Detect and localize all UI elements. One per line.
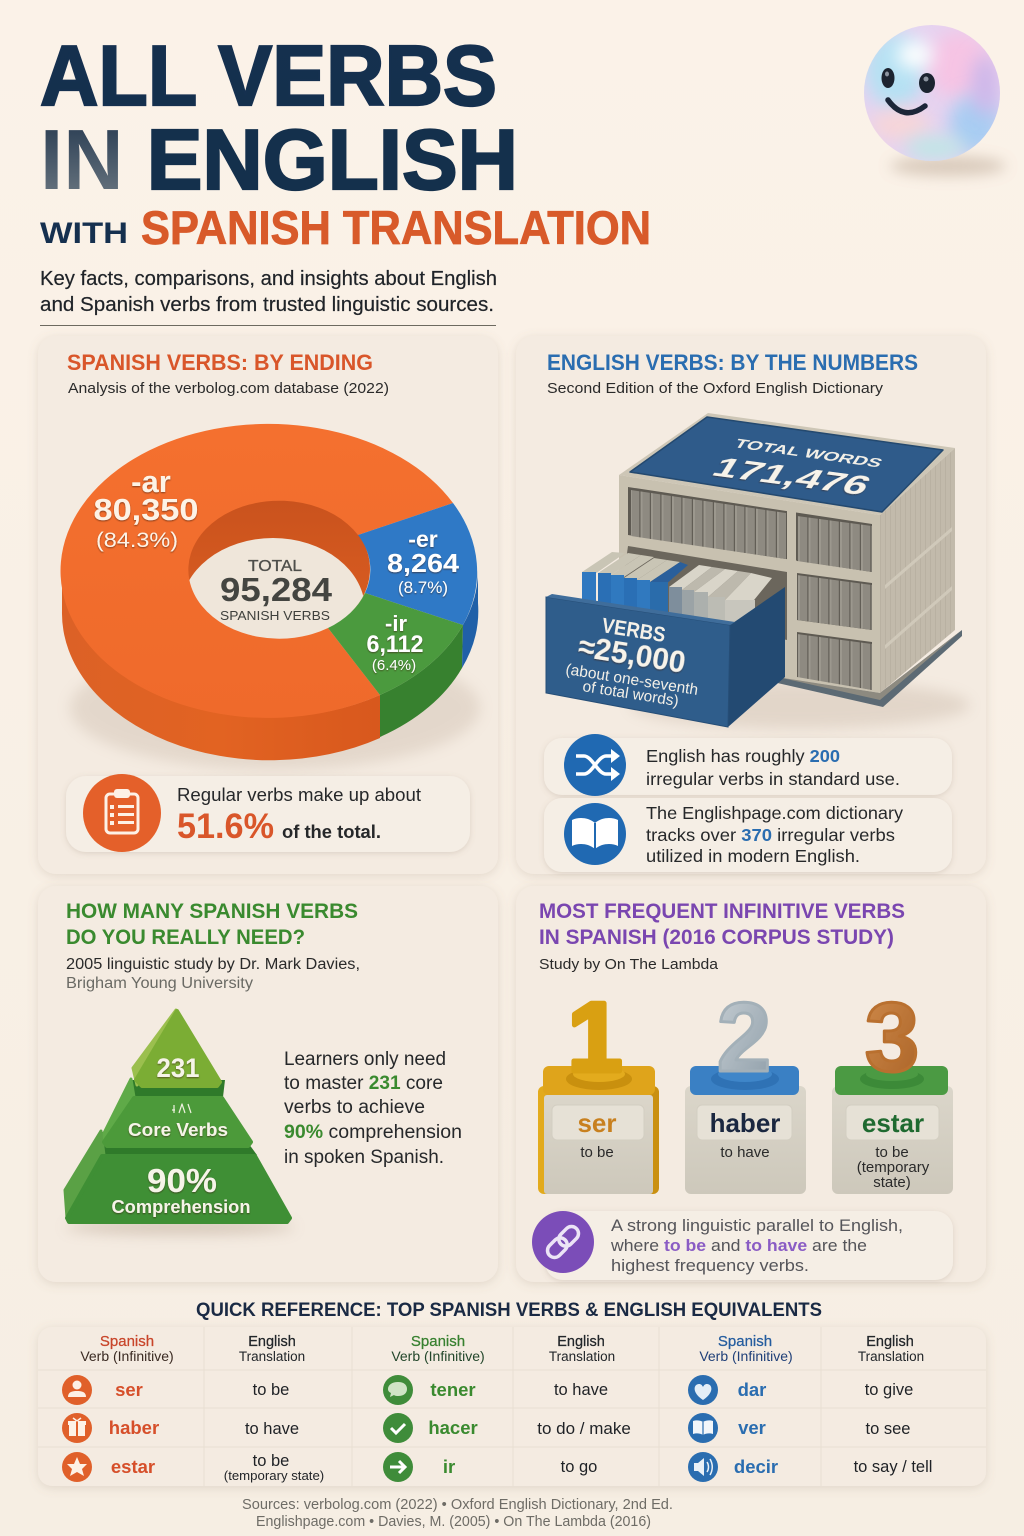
heading: Spanish verbs by ending bbox=[67, 350, 389, 397]
heading: most frequent verbs: IN SPANISH (2016 CORPUS STUDY) bbox=[539, 926, 894, 949]
sources: Englishpage.com • Davies, M. (2005) • On The Lambda (2016) bbox=[256, 1514, 651, 1530]
table header row: Translation bbox=[858, 1349, 924, 1364]
panel: Spanish verbs by ending bbox=[38, 336, 498, 874]
icon: heart bbox=[688, 1375, 718, 1405]
heading: most frequent verbs: MOST FREQUENT INFINITIVE VERBS bbox=[539, 900, 905, 923]
heading: how many verbs: HOW MANY SPANISH VERBS bbox=[66, 900, 358, 923]
heading: how many verbs bbox=[66, 900, 360, 992]
table header row: Translation bbox=[549, 1349, 615, 1364]
segment: -ar: (84.3%) bbox=[96, 529, 178, 552]
segment: -ir bbox=[328, 593, 463, 695]
heading: how many verbs: Brigham Young University bbox=[66, 975, 253, 992]
table header row: Spanish bbox=[100, 1333, 154, 1350]
heading: English verbs bbox=[547, 350, 918, 397]
table header row: Verb (Infinitive) bbox=[699, 1348, 793, 1364]
column group: green verbs: to go bbox=[561, 1458, 597, 1476]
heading: how many verbs: 2005 linguistic study by Dr. Mark Davies, bbox=[66, 956, 360, 973]
column group: red verbs: to have bbox=[245, 1420, 299, 1438]
podium 3: estar: 3 bbox=[865, 982, 919, 1092]
table header row: Spanish bbox=[718, 1333, 772, 1350]
column group: blue verbs: ver bbox=[738, 1417, 766, 1438]
column group: blue verbs: to see bbox=[866, 1420, 910, 1438]
panel: how many Spanish verbs bbox=[38, 886, 498, 1282]
icon: shuffle bbox=[564, 734, 626, 796]
title: SPANISH TRANSLATION bbox=[141, 201, 651, 254]
segment: -ir: (6.4%) bbox=[372, 657, 416, 674]
table heading: QUICK REFERENCE: TOP SPANISH VERBS & ENGLISH EQUIVALENTS bbox=[196, 1300, 822, 1321]
callout: regular verbs: 51.6% bbox=[177, 807, 274, 846]
text: learners need 231: in spoken Spanish. bbox=[284, 1147, 444, 1168]
segment: -er: 8,264 bbox=[387, 548, 460, 578]
column group: blue verbs: to give bbox=[865, 1381, 913, 1399]
callout: linguistic parallel: highest frequency verbs. bbox=[611, 1257, 809, 1275]
table header row: Verb (Infinitive) bbox=[391, 1348, 485, 1364]
column group: green verbs: to have bbox=[554, 1381, 608, 1399]
callout: 200 irregular verbs bbox=[544, 734, 952, 796]
column group: green verbs: hacer bbox=[428, 1417, 478, 1438]
tier: 231 bbox=[133, 1010, 220, 1086]
icon: clipboard bbox=[83, 774, 161, 852]
callout: 370 irregular verbs bbox=[544, 798, 952, 872]
icon: smiling iridescent sphere bbox=[864, 25, 1006, 176]
drawer books bbox=[582, 552, 772, 637]
icon: arrow bbox=[383, 1452, 413, 1482]
segment: -ir: -ir bbox=[385, 611, 407, 636]
heading: most frequent verbs bbox=[539, 900, 905, 973]
heading: Spanish verbs by ending: Analysis of the verbolog.com database (2022) bbox=[68, 380, 389, 397]
podium 2: haber: haber bbox=[710, 1108, 780, 1138]
segment: -er: (8.7%) bbox=[398, 578, 448, 597]
column group: green verbs bbox=[383, 1375, 631, 1482]
column group: red verbs: (temporary state) bbox=[224, 1468, 324, 1483]
segment: -ar bbox=[94, 464, 198, 552]
panel: English verbs by the numbers bbox=[516, 336, 986, 874]
drawer: ≈25,000 bbox=[576, 628, 688, 680]
text: learners need 231: verbs to achieve bbox=[284, 1097, 425, 1118]
heading: most frequent verbs: Study by On The Lambda bbox=[539, 956, 719, 973]
drawer: (about one-seventh bbox=[564, 661, 699, 699]
column group: red verbs bbox=[62, 1375, 324, 1483]
column group: red verbs: to be bbox=[253, 1381, 289, 1399]
tier: 90% comprehension bbox=[65, 1131, 290, 1222]
heading: how many verbs: DO YOU REALLY NEED? bbox=[66, 926, 305, 949]
column group: red verbs: ser bbox=[115, 1379, 143, 1400]
text: learners need 231: Learners only need bbox=[284, 1049, 446, 1070]
table header row: Spanish bbox=[411, 1333, 465, 1350]
heading: Spanish verbs by ending: SPANISH VERBS: BY ENDING bbox=[67, 350, 373, 375]
icon: gift bbox=[62, 1413, 92, 1443]
podium 2: haber: 2 bbox=[717, 982, 771, 1092]
column group: red verbs: haber bbox=[109, 1417, 159, 1438]
table header row: English bbox=[866, 1334, 914, 1350]
podium 1: ser: ser bbox=[577, 1108, 617, 1138]
drawer: VERBS bbox=[600, 614, 667, 647]
segment: -ar: 80,350 bbox=[94, 492, 198, 527]
icon: open book bbox=[564, 803, 626, 865]
podium 3: estar: estar bbox=[862, 1108, 924, 1138]
segment: -ar: -ar bbox=[131, 464, 171, 499]
podium 1: ser: 1 bbox=[568, 982, 622, 1092]
table header row: Verb (Infinitive) bbox=[80, 1348, 174, 1364]
quick reference table bbox=[38, 1327, 986, 1486]
column group: red verbs: to be bbox=[253, 1452, 289, 1470]
tier: 90% comprehension: Comprehension bbox=[112, 1196, 250, 1217]
text: learners need 231 bbox=[284, 1049, 462, 1168]
column group: blue verbs: decir bbox=[734, 1456, 778, 1477]
intro text: Key facts, comparisons, and insights about English bbox=[40, 268, 497, 290]
podium 3: estar: to be bbox=[875, 1144, 909, 1161]
icon: speech bubble bbox=[383, 1375, 413, 1405]
tier: core verbs: Core Verbs bbox=[128, 1119, 228, 1140]
top slab: total words: 171,476 bbox=[706, 452, 877, 501]
callout: linguistic parallel: A strong linguistic parallel to English, bbox=[611, 1217, 903, 1235]
callout: regular verbs bbox=[66, 774, 470, 852]
top slab: total words: TOTAL WORDS bbox=[731, 437, 885, 470]
title bbox=[40, 29, 651, 254]
sources: Sources: verbolog.com (2022) • Oxford English Dictionary, 2nd Ed. bbox=[242, 1497, 673, 1513]
top slab: total words bbox=[630, 417, 943, 512]
callout: regular verbs: of the total. bbox=[282, 822, 381, 842]
podium 3: estar: (temporary bbox=[857, 1159, 930, 1176]
icon: chain link bbox=[532, 1211, 594, 1273]
drawer: of total words) bbox=[581, 678, 680, 710]
podium 3: estar bbox=[832, 982, 953, 1194]
drawer bbox=[546, 552, 785, 727]
table header row bbox=[80, 1333, 924, 1364]
text: learners need 231: 90% comprehension bbox=[284, 1122, 462, 1143]
callout: regular verbs: Regular verbs make up about bbox=[177, 785, 421, 805]
table header row: English bbox=[557, 1334, 605, 1350]
column group: blue verbs bbox=[688, 1375, 932, 1482]
panel: most frequent infinitive verbs bbox=[516, 886, 986, 1282]
segment: -er: -er bbox=[408, 526, 438, 552]
title: WITH bbox=[40, 217, 128, 250]
icon: speaker bbox=[688, 1452, 718, 1482]
heading: English verbs: ENGLISH VERBS: BY THE NUMBERS bbox=[547, 350, 918, 375]
column group: blue verbs: to say / tell bbox=[854, 1458, 932, 1476]
callout: 370 irregular verbs: The Englishpage.com dictionary bbox=[646, 803, 903, 823]
table header row: Translation bbox=[239, 1349, 305, 1364]
text: learners need 231: to master 231 core bbox=[284, 1073, 443, 1094]
tier: 90% comprehension: 90% bbox=[147, 1162, 217, 1199]
intro text: and Spanish verbs from trusted linguistic sources. bbox=[40, 294, 494, 316]
sources bbox=[242, 1497, 673, 1530]
column group: green verbs: to do / make bbox=[537, 1419, 631, 1438]
podium 2: haber bbox=[685, 982, 806, 1194]
icon: star bbox=[62, 1452, 92, 1482]
icon: person bbox=[62, 1375, 92, 1405]
pyramid chart bbox=[65, 1010, 295, 1234]
title: ALL VERBS bbox=[40, 29, 497, 124]
callout: linguistic parallel: where to be and to have are the bbox=[610, 1237, 867, 1255]
callout: 370 irregular verbs: utilized in modern English. bbox=[646, 846, 860, 866]
column group: red verbs: estar bbox=[111, 1456, 155, 1477]
column group: green verbs: ir bbox=[443, 1456, 455, 1477]
segment: -er bbox=[358, 503, 477, 625]
callout: linguistic parallel bbox=[532, 1211, 953, 1280]
icon: book bbox=[688, 1413, 718, 1443]
callout: 200 irregular verbs: irregular verbs in standard use. bbox=[646, 769, 900, 789]
column group: green verbs: tener bbox=[430, 1379, 476, 1400]
donut total bbox=[220, 558, 333, 623]
segment: -ir: 6,112 bbox=[366, 631, 424, 658]
callout: 200 irregular verbs: English has roughly 200 bbox=[646, 746, 840, 766]
table header row: English bbox=[248, 1334, 296, 1350]
title: IN ENGLISH bbox=[40, 113, 518, 208]
tier: core verbs bbox=[104, 1079, 251, 1146]
donut chart bbox=[61, 424, 480, 770]
donut total: 95,284 bbox=[220, 571, 333, 608]
donut total: TOTAL bbox=[248, 558, 302, 575]
intro text bbox=[40, 268, 497, 326]
column group: blue verbs: dar bbox=[738, 1379, 766, 1400]
heading: English verbs: Second Edition of the Oxford English Dictionary bbox=[547, 380, 884, 397]
shelves bbox=[620, 487, 872, 690]
podium 3: estar: state) bbox=[873, 1174, 911, 1191]
podium 1: ser bbox=[538, 982, 659, 1194]
icon: check bbox=[383, 1413, 413, 1443]
donut total: SPANISH VERBS bbox=[220, 608, 330, 623]
podium 2: haber: to have bbox=[720, 1144, 770, 1161]
podium 1: ser: to be bbox=[580, 1144, 614, 1161]
callout: 370 irregular verbs: tracks over 370 irregular verbs bbox=[646, 825, 895, 845]
bookshelf illustration bbox=[546, 413, 970, 729]
tier: 231: 231 bbox=[156, 1053, 200, 1083]
